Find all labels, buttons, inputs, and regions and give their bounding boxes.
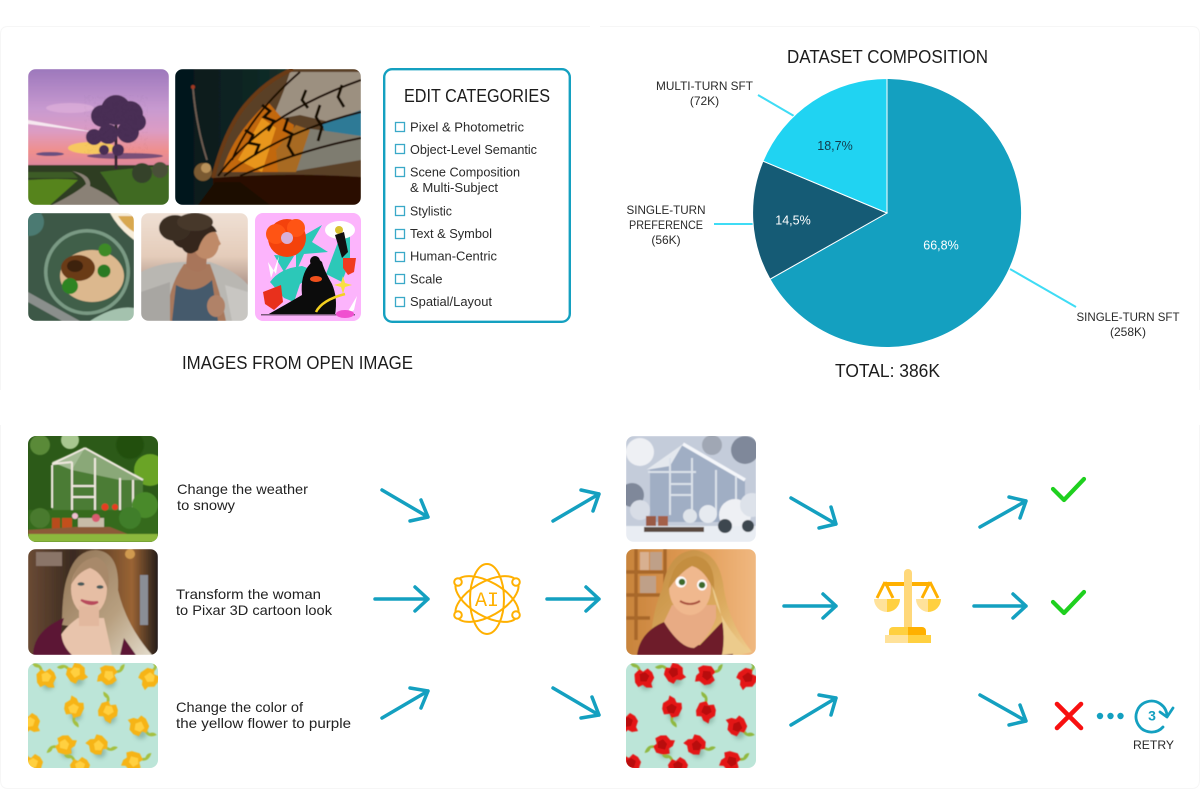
box: edit categories — [384, 69, 570, 322]
photo: chicken and rice bowl — [28, 213, 134, 321]
category: scale — [396, 272, 443, 286]
icon: green check top — [1053, 479, 1084, 500]
label: multi-turn sft — [656, 79, 754, 108]
icon: green check middle — [1053, 592, 1084, 613]
total: TOTAL: 386K — [835, 361, 940, 381]
arrows: model to outputs — [547, 490, 599, 718]
icon: retry 3: 3 — [1148, 708, 1156, 724]
instruction: flower color — [176, 699, 351, 731]
label: single-turn preference: PREFERENCE — [629, 218, 703, 232]
label: retry: RETRY — [1133, 738, 1174, 752]
instruction: cartoon — [176, 586, 333, 618]
arrows: outputs to judge — [784, 498, 836, 725]
instruction: flower color: the yellow flower to purple — [176, 715, 351, 731]
icon: balance scales — [874, 569, 941, 643]
photo: red flowers — [626, 663, 756, 768]
arrows: judge to verdicts — [974, 497, 1026, 725]
category: scene composition — [396, 164, 520, 195]
icon: dots — [1097, 713, 1124, 719]
icon: retry 3 — [1136, 701, 1173, 732]
icon: AI atom: AI — [475, 590, 499, 613]
value: 18,7%: 18,7% — [817, 139, 853, 153]
label: single-turn sft — [1076, 310, 1180, 339]
label: multi-turn sft: (72K) — [690, 94, 719, 108]
category: spatial layout: Spatial/Layout — [410, 294, 492, 309]
instruction: cartoon: to Pixar 3D cartoon look — [176, 602, 333, 618]
slice: single-turn sft — [770, 78, 1022, 347]
instruction: cartoon: Transform the woman — [176, 586, 321, 602]
photo: woman portrait — [28, 549, 158, 655]
category: human-centric: Human-Centric — [410, 248, 497, 264]
category: stylistic: Stylistic — [410, 204, 452, 218]
slice: multi-turn sft — [763, 78, 887, 213]
instruction: flower color: Change the color of — [176, 699, 303, 715]
arrows: instructions to model — [375, 490, 428, 718]
label: single-turn sft: SINGLE-TURN SFT — [1076, 310, 1180, 324]
photo: woman running — [141, 213, 248, 321]
value: 66,8%: 66,8% — [923, 238, 959, 252]
instruction: weather — [177, 481, 308, 513]
slice: single-turn preference — [753, 161, 887, 279]
heading: edit categories: EDIT CATEGORIES — [404, 86, 550, 106]
category: text and symbol: Text & Symbol — [410, 226, 492, 241]
photo: greenhouse — [28, 436, 158, 542]
illustration: pink floral figure — [255, 213, 361, 321]
label: single-turn sft: (258K) — [1110, 325, 1146, 339]
category: scene composition: Scene Composition — [410, 164, 520, 180]
illustration: cartoon woman — [626, 549, 756, 655]
photo: snowy greenhouse — [626, 436, 756, 542]
photo: tree at sunset — [28, 69, 169, 205]
category: scene composition: & Multi-Subject — [410, 180, 498, 195]
label: single-turn preference — [626, 203, 706, 247]
leader lines — [714, 95, 1076, 307]
photo: yellow flowers — [28, 663, 158, 768]
label: single-turn preference: SINGLE-TURN — [626, 203, 706, 217]
icon: red cross — [1057, 704, 1081, 728]
category: scale: Scale — [410, 272, 443, 286]
value: 14,5%: 14,5% — [775, 214, 811, 228]
label: multi-turn sft: MULTI-TURN SFT — [656, 79, 754, 93]
pie chart — [714, 78, 1076, 347]
photo: butterfly wing — [175, 69, 361, 205]
category: object-level semantic: Object-Level Semantic — [410, 142, 537, 157]
icon: AI atom — [448, 564, 526, 634]
instruction: weather: Change the weather — [177, 481, 308, 497]
label: single-turn preference: (56K) — [651, 233, 681, 247]
category: pixel and photometric: Pixel & Photometric — [410, 120, 524, 134]
caption: images from open image: IMAGES FROM OPEN IMAGE — [182, 353, 413, 373]
heading: dataset composition: DATASET COMPOSITION — [787, 47, 988, 67]
instruction: weather: to snowy — [177, 497, 235, 513]
